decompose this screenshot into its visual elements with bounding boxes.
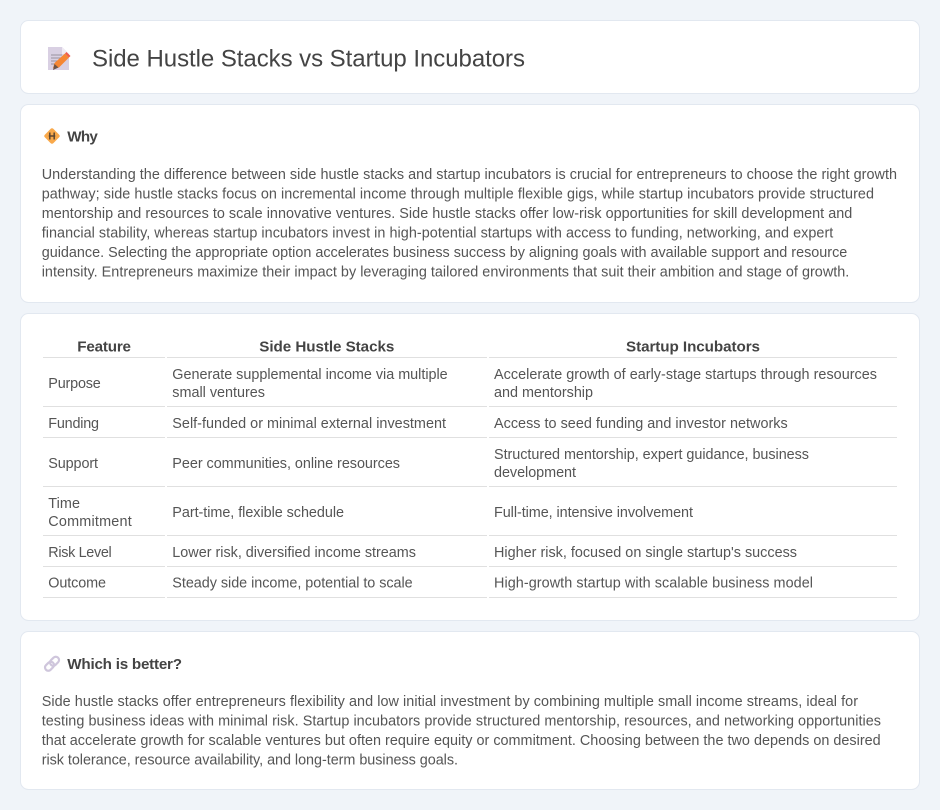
row: time commitment: Full-time, intensive involvement (494, 505, 693, 521)
row: time commitment (48, 496, 693, 530)
text block: which paragraph: risk tolerance, resource availability, and long-term business goals. (42, 753, 458, 769)
row: support: development (494, 465, 576, 481)
text block: why paragraph: mentorship and resources to scale innovative ventures. Side hustle stacks offer low-risk opportunities for skill development and (42, 206, 852, 222)
row: risk level: Lower risk, diversified income streams (172, 545, 416, 561)
row: funding: Funding (48, 416, 99, 432)
panel: comparison table (20, 314, 920, 620)
row: time commitment: Commitment (48, 514, 132, 530)
row: risk level (48, 545, 797, 561)
row: purpose: and mentorship (494, 385, 593, 401)
row: outcome (48, 576, 813, 592)
text block: which paragraph: testing business ideas with minimal risk. Startup incubators provide structured mentorship, resources, and networking opportunities (42, 713, 881, 729)
row: purpose: Accelerate growth of early-stage startups through resources (494, 367, 877, 383)
row: funding: Self-funded or minimal external investment (172, 416, 446, 432)
text block: which paragraph: Side hustle stacks offer entrepreneurs flexibility and low initial investment by combining multiple small income streams, ideal for (42, 694, 858, 710)
row: funding: Access to seed funding and investor networks (494, 416, 788, 432)
icon: orange diamond sign (44, 128, 60, 144)
row: time commitment: Part-time, flexible schedule (172, 505, 344, 521)
icon: memo with pencil (48, 47, 70, 70)
panel: header (20, 20, 920, 94)
row: purpose: small ventures (172, 385, 265, 401)
table header: Feature (77, 339, 131, 356)
table header (77, 339, 760, 356)
text block: why paragraph: pathway; side hustle stacks focus on incremental income through multiple flexible gigs, while startup incubators provide structured (42, 186, 874, 202)
text block: which paragraph (42, 694, 881, 769)
icon: link (44, 655, 60, 672)
row: risk level: Risk Level (48, 545, 112, 561)
row: support: Peer communities, online resources (172, 456, 400, 472)
row: support (48, 447, 809, 481)
table header: Startup Incubators (626, 339, 760, 356)
text block: why paragraph (42, 167, 897, 281)
panel: which is better (20, 632, 920, 790)
title: Side Hustle Stacks vs Startup Incubators (92, 46, 525, 72)
row: outcome: Outcome (48, 576, 106, 592)
row: outcome: High-growth startup with scalable business model (494, 576, 813, 592)
panel: why (20, 104, 920, 302)
table header: Side Hustle Stacks (259, 339, 394, 356)
text block: why paragraph: Understanding the difference between side hustle stacks and startup incubators is crucial for entrepreneurs to choose the right growth (42, 167, 897, 183)
row: risk level: Higher risk, focused on single startup's success (494, 545, 797, 561)
heading: why: Why (67, 129, 98, 146)
text block: why paragraph: intensity. Entrepreneurs maximize their impact by leveraging tailored environments that suit their ambition and stage of growth. (42, 265, 849, 281)
row: support: Support (48, 456, 98, 472)
row: outcome: Steady side income, potential to scale (172, 576, 413, 592)
text block: why paragraph: financial stability, whereas startup incubators invest in high-potential startups with access to funding, networking, and expert (42, 226, 833, 242)
heading: which is better: Which is better? (67, 656, 182, 673)
row: purpose: Generate supplemental income via multiple (172, 367, 448, 383)
row: support: Structured mentorship, expert guidance, business (494, 447, 809, 463)
text block: why paragraph: guidance. Selecting the appropriate option accelerates business success by aligning goals with available support and resource (42, 245, 847, 261)
row: purpose: Purpose (48, 376, 101, 392)
row: time commitment: Time (48, 496, 80, 512)
row: funding (48, 416, 788, 432)
text block: which paragraph: that accelerate growth for scalable ventures but often require equity or commitment. Choosing between the two depends on desired (42, 733, 881, 749)
row: purpose (48, 367, 877, 401)
